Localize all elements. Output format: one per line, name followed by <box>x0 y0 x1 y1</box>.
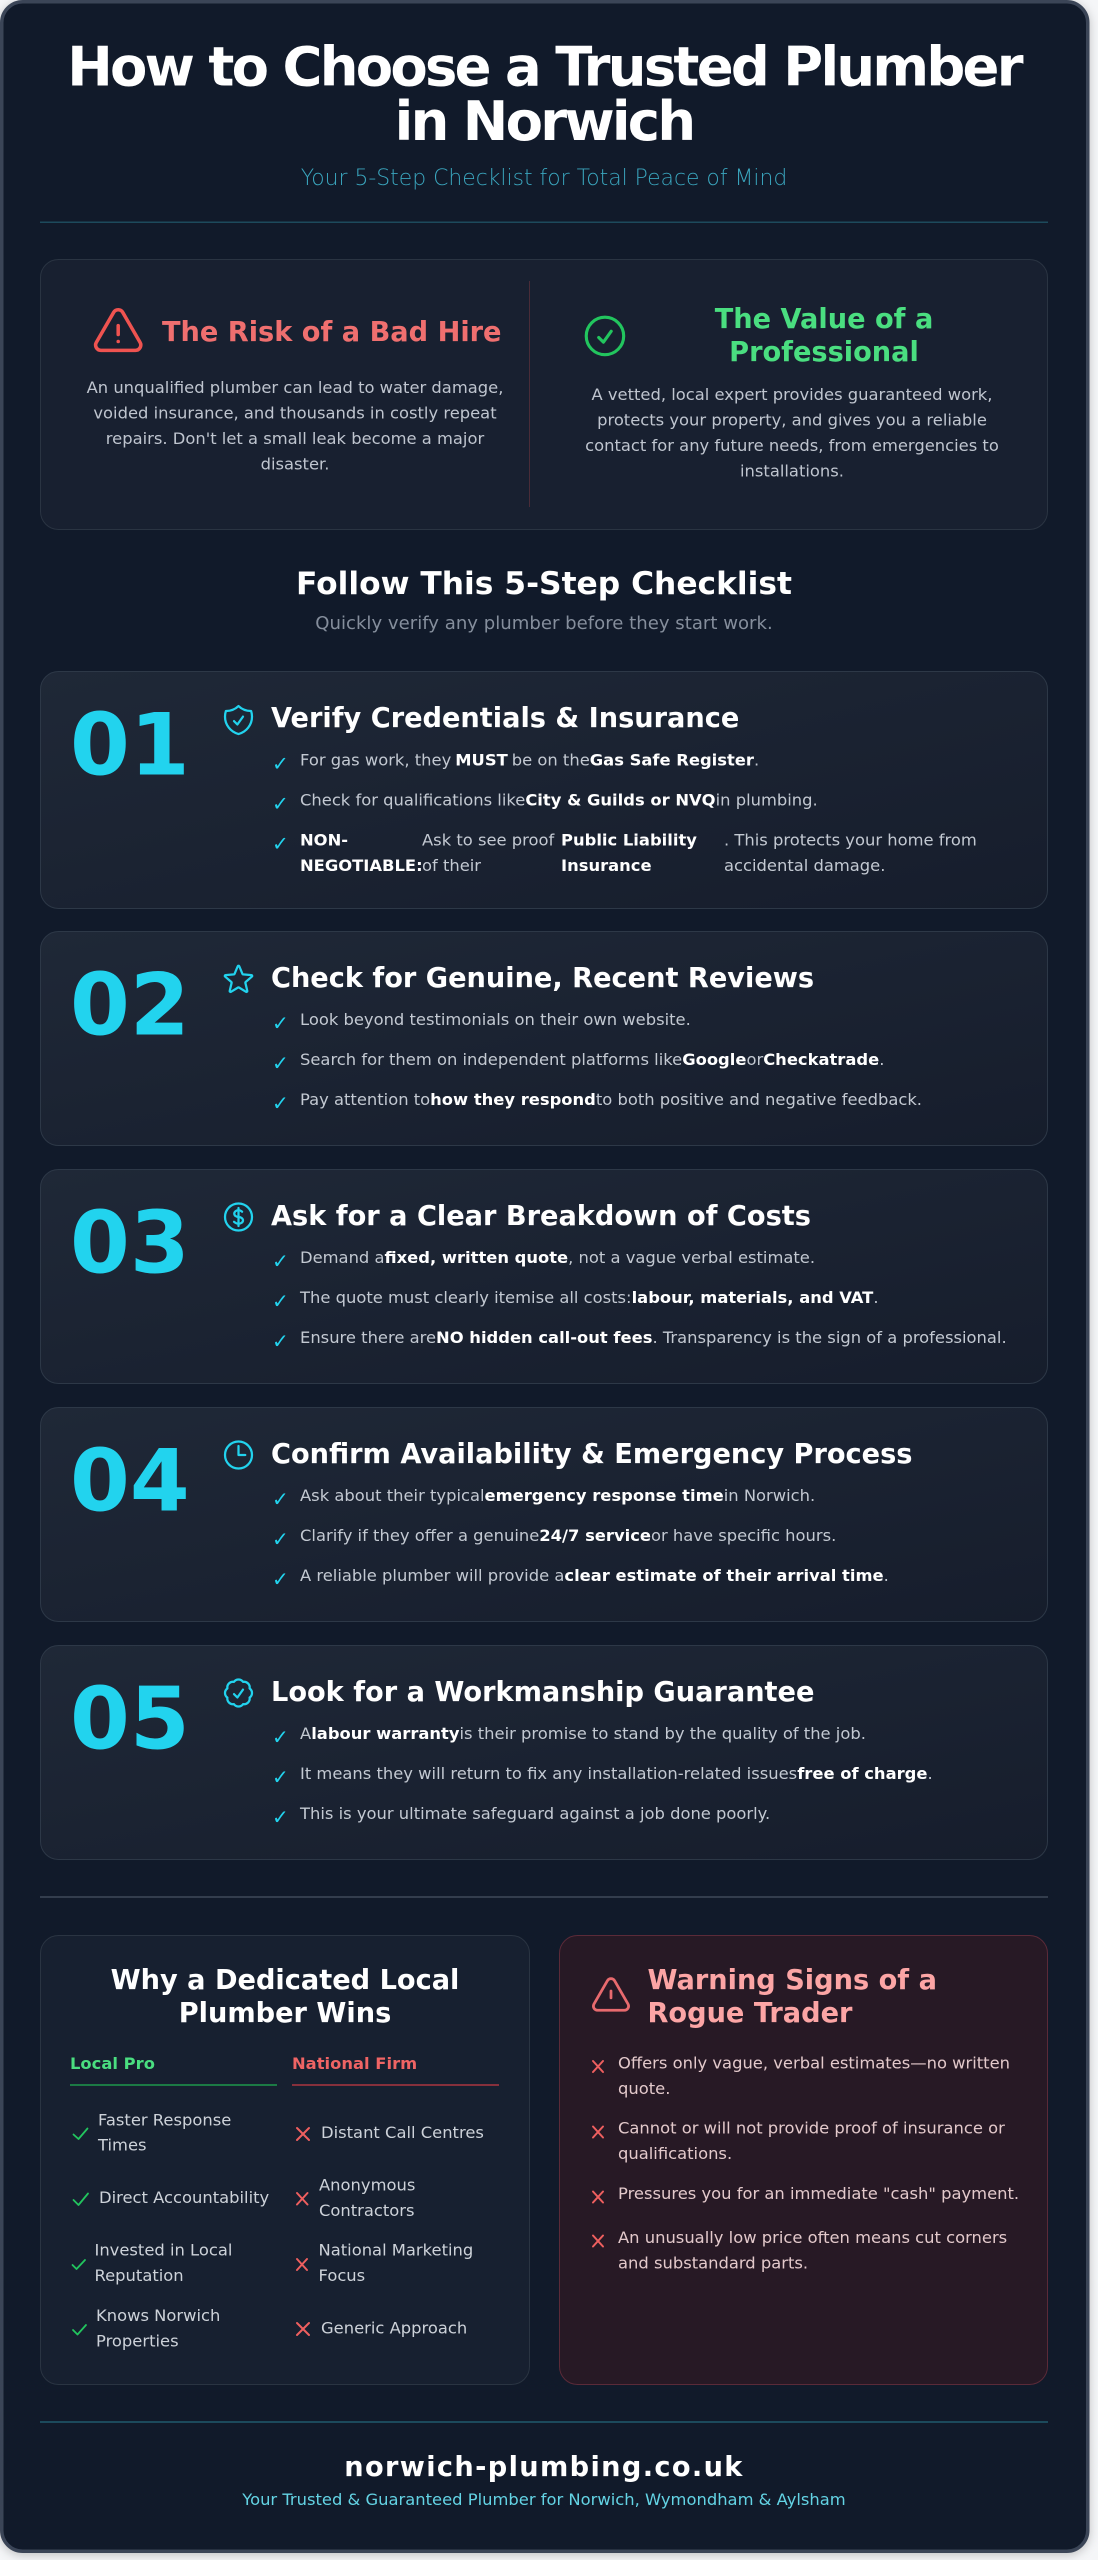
value text: contact for any future needs, from emergencies to <box>585 436 999 455</box>
national firm list: Generic Approach <box>321 2318 467 2338</box>
checklist items: ✓ <box>272 1765 289 1789</box>
checklist items: ✓ <box>272 832 289 856</box>
local pro list: Properties <box>96 2332 179 2350</box>
checklist items: Search for them on independent platforms likeGoogleorCheckatrade. <box>300 1050 884 1069</box>
step number 02: 02 <box>70 956 190 1056</box>
step title: Ask for a Clear Breakdown of Costs <box>271 1201 811 1232</box>
risk text: voided insurance, and thousands in costly repeat <box>93 404 497 422</box>
checklist items: A reliable plumber will provide aclear estimate of their arrival time. <box>300 1566 889 1585</box>
footer tagline: Your Trusted & Guaranteed Plumber for Norwich, Wymondham & Aylsham <box>241 2490 846 2509</box>
icon: clock <box>225 1442 252 1469</box>
checklist items: ✓ <box>272 1051 289 1075</box>
risk text: repairs. Don't let a small leak become a major <box>106 429 484 448</box>
icon: star <box>225 966 252 992</box>
checklist items: ✓ <box>272 1487 289 1511</box>
step number 04: 04 <box>70 1432 190 1532</box>
checklist items: ✓ <box>272 1091 289 1115</box>
comparison heading: Why a Dedicated Local <box>111 1965 459 1996</box>
title: in Norwich <box>395 90 693 153</box>
footer domain: norwich-plumbing.co.uk <box>344 2452 744 2483</box>
checklist items: NON- <box>300 830 348 850</box>
checklist items <box>272 750 977 875</box>
warning list <box>593 2054 1019 2272</box>
step number 01: 01 <box>70 696 190 796</box>
title: How to Choose a Trusted Plumber <box>67 36 1024 98</box>
local pro list <box>72 2110 270 2350</box>
checklist items: ✓ <box>272 752 289 776</box>
checklist items: ✓ <box>272 1725 289 1749</box>
checklist items: ✓ <box>272 1289 289 1313</box>
panel: step 4 <box>40 1408 1048 1622</box>
checklist items: ✓ <box>272 1011 289 1035</box>
column header: national firm: National Firm <box>292 2054 417 2073</box>
checklist items: ✓ <box>272 1527 289 1551</box>
checklist items: This is your ultimate safeguard against a job done poorly. <box>299 1804 770 1823</box>
checklist items: ✓ <box>272 792 289 816</box>
checklist items: NEGOTIABLE: <box>300 856 423 875</box>
warning list: qualifications. <box>618 2144 732 2163</box>
icon: shield check <box>225 706 252 734</box>
checklist items: Insurance <box>561 856 652 875</box>
warning list: Pressures you for an immediate "cash" payment. <box>618 2184 1019 2203</box>
warning heading: Warning Signs of a <box>648 1965 937 1996</box>
checklist items: of their <box>422 856 481 875</box>
step title: Confirm Availability & Emergency Process <box>271 1439 912 1470</box>
local pro list: Direct Accountability <box>99 2188 270 2207</box>
panel: step 1 <box>40 672 1048 908</box>
step number 03: 03 <box>70 1194 190 1294</box>
icon: dollar <box>225 1204 252 1231</box>
panel: step 5 <box>40 1646 1048 1860</box>
warning list: An unusually low price often means cut corners <box>618 2228 1007 2247</box>
warning list: Offers only vague, verbal estimates—no written <box>618 2054 1010 2072</box>
panel: risk and value <box>40 260 1048 530</box>
step number 05: 05 <box>70 1670 190 1770</box>
step title: Verify Credentials & Insurance <box>271 703 739 734</box>
checklist items: Demand afixed, written quote, not a vague verbal estimate. <box>300 1248 815 1267</box>
local pro list: Times <box>97 2136 147 2155</box>
local pro list: Faster Response <box>98 2110 231 2129</box>
national firm list <box>297 2123 484 2338</box>
checklist items: Check for qualifications likeCity & Guilds or NVQin plumbing. <box>300 790 818 810</box>
national firm list: National Marketing <box>318 2240 473 2260</box>
checklist items: It means they will return to fix any installation-related issuesfree of charge. <box>300 1764 933 1783</box>
checklist items: The quote must clearly itemise all costs:labour, materials, and VAT. <box>299 1288 879 1307</box>
panel: step 2 <box>40 932 1048 1146</box>
warning list: quote. <box>618 2079 670 2098</box>
checklist items: Look beyond testimonials on their own website. <box>300 1010 691 1029</box>
risk column <box>87 310 503 474</box>
warning list: Cannot or will not provide proof of insurance or <box>618 2118 1005 2138</box>
checklist items: For gas work, theyMUSTbe on theGas Safe Register. <box>300 750 759 770</box>
value column <box>585 304 999 480</box>
value heading: The Value of a <box>715 304 933 335</box>
step title: Look for a Workmanship Guarantee <box>271 1677 814 1708</box>
icon: check circle <box>586 317 624 355</box>
checklist items: Pay attention tohow they respondto both positive and negative feedback. <box>300 1090 922 1109</box>
icon: badge check <box>225 1680 252 1706</box>
checklist items <box>272 1010 922 1115</box>
warning heading: Rogue Trader <box>648 1998 853 2029</box>
panel: warning signs <box>560 1936 1048 2384</box>
warning list: and substandard parts. <box>618 2254 808 2272</box>
icon: warning triangle <box>593 1979 629 2010</box>
checklist items: Ask about their typicalemergency response timein Norwich. <box>300 1486 815 1505</box>
icon: warning triangle <box>96 310 141 350</box>
comparison heading: Plumber Wins <box>179 1998 391 2029</box>
national firm list: Focus <box>318 2266 365 2285</box>
checklist items <box>272 1486 889 1591</box>
national firm list: Distant Call Centres <box>321 2123 484 2142</box>
local pro list: Invested in Local <box>94 2240 232 2260</box>
risk text: An unqualified plumber can lead to water damage, <box>87 378 503 397</box>
checklist items: ✓ <box>272 1567 289 1591</box>
checklist items: accidental damage. <box>724 856 885 875</box>
local pro list: Knows Norwich <box>96 2306 220 2325</box>
column header: local pro: Local Pro <box>70 2054 155 2073</box>
checklist items <box>272 1248 1007 1353</box>
checklist items: Public Liability <box>561 830 697 850</box>
value text: A vetted, local expert provides guaranteed work, <box>592 385 992 404</box>
panel: local vs national comparison <box>40 1936 530 2384</box>
step title: Check for Genuine, Recent Reviews <box>271 963 814 994</box>
subtitle: Your 5-Step Checklist for Total Peace of Mind <box>301 166 787 191</box>
checklist items: Ask to see proof <box>422 830 556 850</box>
checklist subheading: Quickly verify any plumber before they start work. <box>315 613 773 634</box>
risk heading: The Risk of a Bad Hire <box>162 317 502 348</box>
value heading: Professional <box>729 337 919 368</box>
risk text: disaster. <box>261 454 329 474</box>
national firm list: Contractors <box>319 2201 415 2220</box>
checklist items: Ensure there areNO hidden call-out fees. Transparency is the sign of a professional. <box>300 1328 1007 1347</box>
value text: installations. <box>740 462 844 480</box>
checklist items: ✓ <box>272 1805 289 1829</box>
checklist items: Clarify if they offer a genuine24/7 serviceor have specific hours. <box>300 1526 836 1545</box>
checklist items: Alabour warrantyis their promise to stand by the quality of the job. <box>300 1724 866 1743</box>
checklist items: ✓ <box>272 1329 289 1353</box>
national firm list: Anonymous <box>319 2176 415 2194</box>
panel: step 3 <box>40 1170 1048 1384</box>
local pro list: Reputation <box>94 2266 184 2285</box>
checklist heading: Follow This 5-Step Checklist <box>296 566 792 602</box>
value text: protects your property, and gives you a reliable <box>597 410 987 430</box>
checklist items: ✓ <box>272 1249 289 1273</box>
checklist items: . This protects your home from <box>724 830 977 850</box>
checklist items <box>272 1724 933 1829</box>
